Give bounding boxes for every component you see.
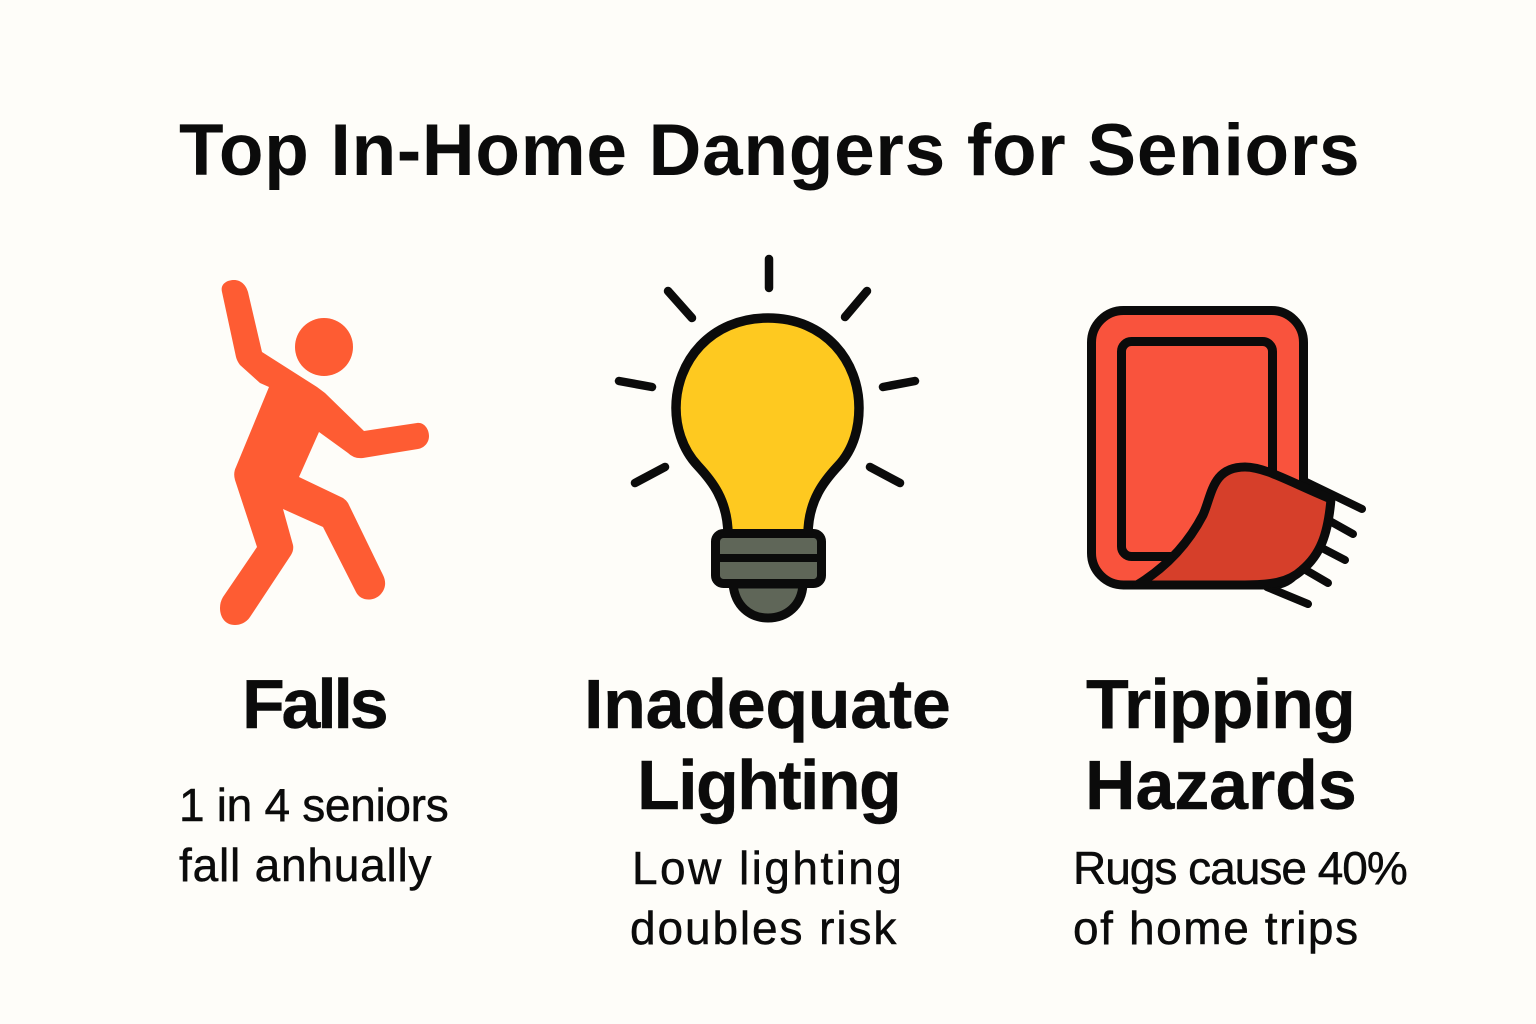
text: lighting statistic: Low lighting: [632, 842, 904, 894]
heading: tripping hazards: [1085, 665, 1357, 824]
text: falls statistic: [179, 779, 448, 891]
text: tripping statistic: [1073, 842, 1407, 954]
text: lighting statistic: doubles risk: [630, 902, 898, 954]
title: Top In-Home Dangers for Seniors: [179, 110, 1360, 191]
icon: light bulb: [619, 259, 915, 618]
text: tripping statistic: of home trips: [1073, 902, 1360, 954]
text: tripping statistic: Rugs cause 40%: [1073, 842, 1407, 894]
heading: inadequate lighting: [584, 665, 951, 824]
heading: tripping hazards: Tripping: [1086, 665, 1355, 743]
heading: inadequate lighting: Inadequate: [584, 665, 951, 743]
text: lighting statistic: [630, 842, 904, 954]
icon: falling person: [220, 280, 429, 625]
heading: tripping hazards: Hazards: [1085, 746, 1357, 824]
text: falls statistic: fall anhually: [179, 839, 432, 891]
icon: rug with curled corner: [1092, 310, 1362, 604]
heading: inadequate lighting: Lighting: [637, 746, 900, 824]
text: falls statistic: 1 in 4 seniors: [179, 779, 448, 831]
heading: falls: Falls: [242, 665, 386, 743]
